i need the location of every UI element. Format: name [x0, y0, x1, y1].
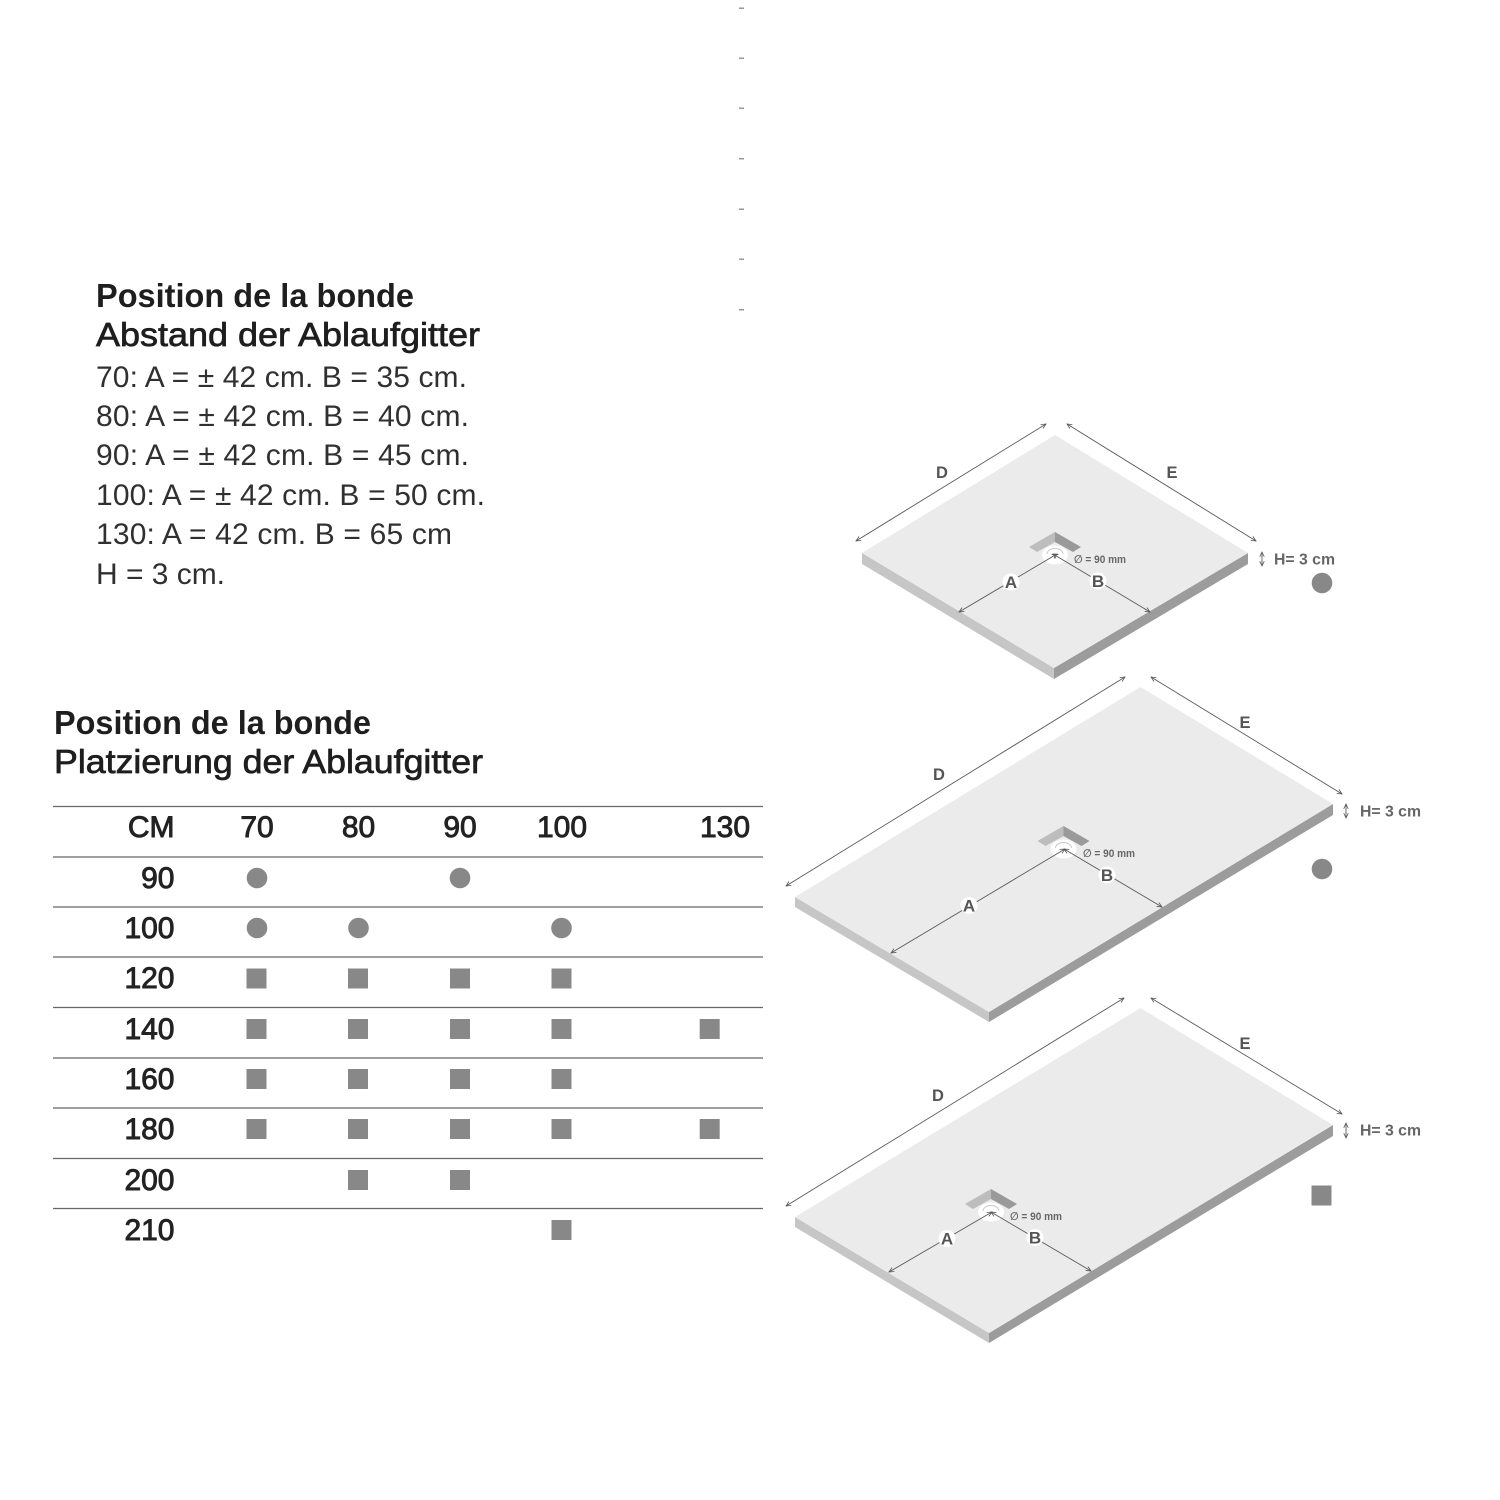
- label B: B: [1092, 572, 1104, 591]
- marker: circle: [1312, 859, 1332, 879]
- dimension arrow B: [1053, 554, 1150, 612]
- marker: square: [1312, 1186, 1332, 1206]
- heading: position de la bonde: Position de la bonde: [54, 704, 371, 741]
- dimension arrow A: [959, 554, 1057, 612]
- row 120: 120: [124, 962, 174, 995]
- dimension arrow A: [891, 849, 1065, 953]
- label E: E: [1239, 1035, 1251, 1053]
- heading: abstand der ablaufgitter: Abstand der Ablaufgitter: [96, 316, 480, 353]
- label D: D: [933, 766, 945, 784]
- label D: D: [936, 464, 948, 482]
- row 120: [124, 962, 572, 995]
- drain: [1038, 826, 1090, 858]
- dimension arrow E: [1151, 677, 1342, 794]
- dimension arrow E: [1151, 998, 1342, 1114]
- row 200: [124, 1164, 470, 1197]
- heading: platzierung der ablaufgitter: Platzierung der Ablaufgitter: [54, 743, 483, 780]
- drain: [965, 1189, 1017, 1222]
- row 160: 160: [124, 1063, 174, 1096]
- tray slab: [862, 435, 1248, 679]
- row 100: [124, 912, 572, 945]
- row 100: 100: [124, 912, 174, 945]
- height line: H = 3 cm.: [96, 558, 225, 591]
- heading: position de la bonde: Position de la bonde: [96, 277, 414, 314]
- dimension arrow E: [1067, 424, 1256, 541]
- spacing line 70: 70: A = ± 42 cm. B = 35 cm.: [96, 361, 467, 394]
- height arrow: [1345, 1123, 1347, 1138]
- table: drain placement by size: [53, 806, 763, 1247]
- row 210: 210: [124, 1214, 174, 1247]
- spacing line 80: 80: A = ± 42 cm. B = 40 cm.: [96, 400, 469, 433]
- row 140: [124, 1013, 720, 1046]
- table header row: 90: [443, 811, 477, 844]
- spacing line 130: 130: A = 42 cm. B = 65 cm: [96, 518, 452, 551]
- table header row: 130: [700, 811, 750, 844]
- label B: B: [1101, 866, 1113, 885]
- row 160: [124, 1063, 572, 1096]
- height label: H= 3 cm: [1360, 1122, 1421, 1140]
- diagram: rectangular tray with offset drain: [786, 998, 1421, 1343]
- row 210: [124, 1214, 572, 1247]
- table header row: [128, 811, 750, 844]
- row 200: 200: [124, 1164, 174, 1197]
- spacing line 100: 100: A = ± 42 cm. B = 50 cm.: [96, 479, 485, 512]
- label E: E: [1239, 714, 1251, 732]
- tray slab: [795, 687, 1333, 1022]
- diagram: rectangular tray with central drain: [786, 677, 1421, 1022]
- label E: E: [1166, 464, 1178, 482]
- drain diameter: ∅ = 90 mm: [1083, 848, 1135, 860]
- dimension arrow B: [1064, 849, 1162, 907]
- row 140: 140: [124, 1013, 174, 1046]
- spacing line 90: 90: A = ± 42 cm. B = 45 cm.: [96, 439, 469, 472]
- label A: A: [1005, 573, 1017, 592]
- dimension arrow D: [856, 424, 1046, 541]
- dimension arrow A: [889, 1212, 992, 1272]
- drain diameter: ∅ = 90 mm: [1010, 1211, 1062, 1223]
- height label: H= 3 cm: [1274, 552, 1335, 568]
- row 90: 90: [141, 862, 174, 895]
- label B: B: [1029, 1228, 1041, 1248]
- text block: table heading: [54, 704, 483, 780]
- dimension arrow B: [991, 1212, 1091, 1271]
- diagram: square shower tray: [856, 424, 1335, 679]
- row 90: [141, 862, 470, 895]
- table header row: 80: [342, 811, 375, 844]
- marker: circle: [1312, 573, 1332, 593]
- tray slab: [795, 1008, 1333, 1343]
- table header row: 100: [537, 811, 587, 844]
- height arrow: [1261, 552, 1263, 566]
- row 180: [124, 1113, 720, 1146]
- row 180: 180: [124, 1113, 174, 1146]
- label D: D: [932, 1087, 944, 1105]
- table header row: CM: [128, 811, 174, 844]
- dimension arrow D: [786, 677, 1125, 886]
- label A: A: [963, 896, 975, 916]
- text block: drain spacing: [96, 277, 485, 591]
- drain: [1029, 532, 1081, 564]
- dimension arrow D: [786, 998, 1124, 1206]
- height arrow: [1345, 804, 1347, 818]
- height label: H= 3 cm: [1360, 804, 1421, 820]
- table header row: 70: [240, 811, 274, 844]
- drain diameter: ∅ = 90 mm: [1074, 554, 1126, 566]
- label A: A: [941, 1230, 953, 1248]
